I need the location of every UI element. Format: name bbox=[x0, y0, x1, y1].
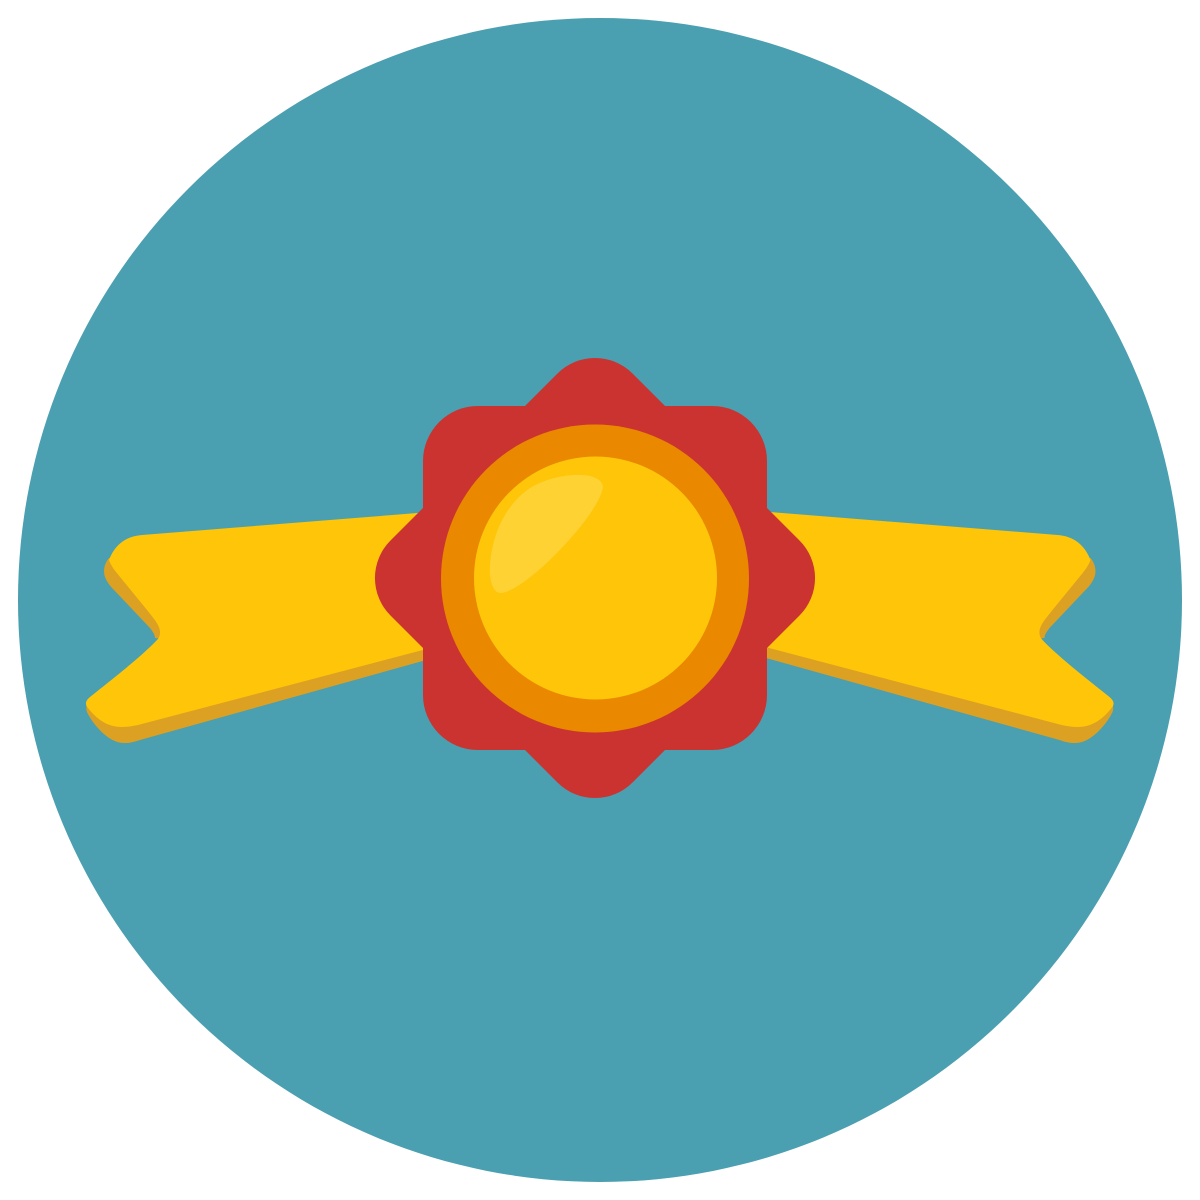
gold medal centre bbox=[474, 456, 717, 700]
ribbon: right tail bbox=[720, 508, 1114, 743]
orange ring bbox=[441, 424, 749, 732]
ribbon: left tail bbox=[86, 508, 480, 743]
medal highlight bbox=[490, 475, 603, 593]
ribbon right shadow bbox=[720, 558, 1113, 743]
ribbon left face bbox=[86, 508, 480, 727]
red rosette bbox=[375, 358, 815, 798]
ribbon right face bbox=[720, 508, 1114, 727]
ribbon left shadow bbox=[86, 558, 480, 743]
